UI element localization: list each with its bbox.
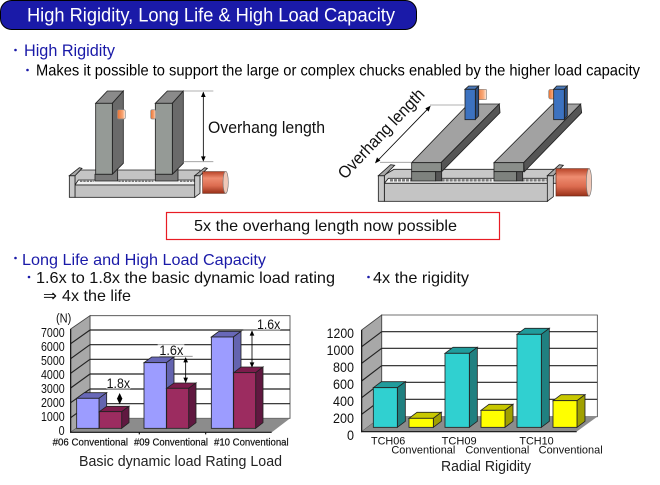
axis labels: 200	[333, 410, 354, 426]
motor	[556, 169, 589, 196]
bar chart: radial rigidity	[327, 315, 603, 457]
category labels: Conventional	[391, 445, 455, 457]
axis labels: 6000	[41, 340, 65, 354]
workpiece pins	[117, 110, 125, 119]
axis labels: 3000	[41, 382, 65, 396]
multiplier annotations: 1.6x	[257, 316, 280, 332]
bars	[77, 331, 263, 428]
text: load rating and life	[28, 270, 335, 305]
dimension lines	[183, 91, 213, 162]
axis labels: 1000	[41, 410, 65, 424]
category labels: #06 Conventional	[53, 438, 128, 449]
heading: Long Life and High Load Capacity: Long Life and High Load Capacity	[22, 252, 266, 269]
machine base rear	[75, 170, 200, 185]
label: overhang length: Overhang length	[208, 118, 325, 137]
axis labels: 400	[333, 393, 354, 409]
category labels: Conventional	[539, 445, 603, 457]
axis labels	[327, 325, 354, 443]
multiplier annotations: 1.6x	[159, 342, 183, 358]
chart title: radial rigidity: Radial Rigidity	[441, 458, 531, 475]
dimension lines	[380, 105, 465, 162]
axis labels	[41, 311, 71, 438]
axis labels: 0	[59, 424, 65, 438]
callout: 5x overhang	[166, 212, 500, 240]
base front	[384, 183, 548, 201]
axis labels: 1000	[327, 342, 354, 358]
base front	[75, 185, 195, 197]
axis labels: 1200	[327, 325, 354, 341]
multiplier annotations	[106, 316, 281, 404]
category labels: #09 Conventional	[134, 438, 208, 449]
category labels	[371, 436, 603, 457]
label: rotated overhang length: Overhang length	[334, 85, 428, 183]
machine rear	[384, 169, 557, 183]
text: load rating and life: 4x the life	[62, 288, 131, 305]
category labels: #10 Conventional	[214, 438, 289, 449]
axis labels: 800	[333, 359, 354, 375]
axis labels: 7000	[41, 326, 65, 340]
diagram: vertical overhang machine	[69, 91, 228, 197]
category labels	[53, 438, 289, 449]
heading: High Rigidity: High Rigidity	[24, 41, 115, 60]
axis labels: 2000	[41, 396, 65, 410]
axis labels: 4000	[41, 368, 65, 382]
arm 2	[494, 104, 581, 163]
axis labels: (N)	[56, 311, 71, 325]
axis labels: 600	[333, 376, 354, 392]
bars	[373, 328, 585, 427]
blue chuck 1	[475, 89, 487, 100]
diagram: horizontal overhang machine	[375, 86, 592, 201]
arm 1	[412, 104, 499, 163]
title banner	[0, 0, 416, 30]
chart frame	[71, 316, 290, 434]
text: 4x the rigidity: 4x the rigidity	[373, 270, 469, 287]
category labels: TCH06	[371, 436, 405, 448]
motor	[203, 172, 226, 193]
column 2	[155, 91, 183, 103]
column 1	[96, 91, 123, 103]
axis labels: 0	[347, 427, 354, 443]
category labels: TCH09	[442, 436, 477, 448]
category labels: TCH10	[519, 436, 554, 448]
callout: 5x overhang: 5x the overhang length now possible	[194, 218, 457, 235]
category labels: Conventional	[465, 445, 529, 457]
multiplier annotations: 1.8x	[107, 375, 130, 391]
blue chuck 2	[549, 89, 555, 99]
axis labels: 5000	[41, 354, 65, 368]
text: load rating and life: 1.6x to 1.8x the basic dynamic load rating	[36, 270, 335, 287]
chart frame	[362, 315, 597, 432]
title banner: High Rigidity, Long Life & High Load Capacity	[27, 6, 395, 26]
chart title: basic dynamic load rating: Basic dynamic load Rating Load	[79, 453, 282, 470]
bar chart: basic dynamic load rating	[41, 311, 290, 449]
text: load rating and life: ⇒	[43, 286, 57, 305]
